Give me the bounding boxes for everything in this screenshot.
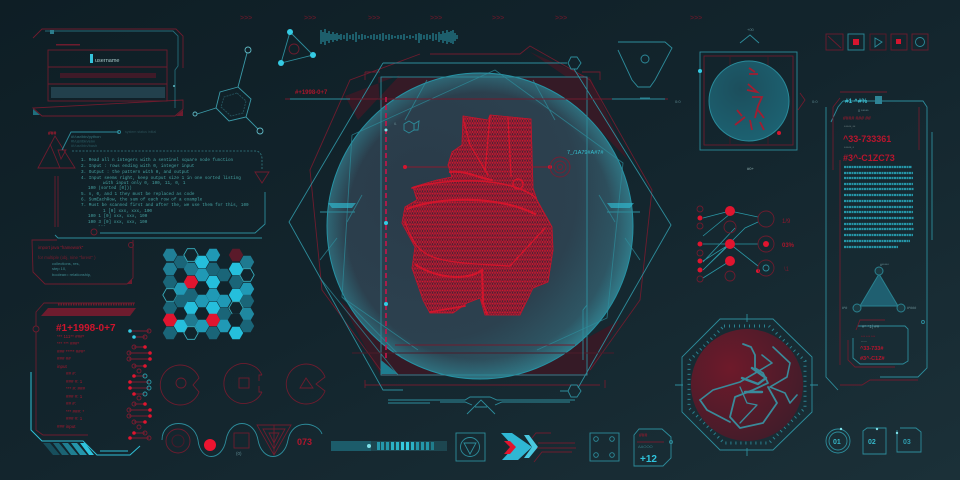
panel: code listing: 1. Read all n integers with a sentinel square node function	[81, 158, 234, 163]
panel: code listing: 4. Input seems right, keep output size 1 in one sorted listing	[81, 176, 241, 181]
sphere labels: 0:0	[675, 99, 681, 104]
panel: code listing: 100 (sorted [0]))	[88, 186, 132, 191]
warning triangle	[38, 131, 75, 168]
target crosshair	[405, 166, 550, 168]
top arrow glyphs: >>>	[492, 15, 504, 22]
panel: login form	[33, 29, 183, 116]
central scanner frame	[285, 46, 671, 414]
hex node bottom	[568, 385, 581, 397]
small triangle marker	[255, 172, 269, 183]
panel: data readout: *****,**	[844, 125, 856, 129]
red specimen	[735, 68, 764, 130]
panel: data readout: #3^-C1ZC73	[843, 153, 895, 163]
top arrow glyphs: >>>	[368, 15, 380, 22]
triangle diagram: #*#	[842, 306, 847, 310]
dark red backing	[340, 52, 628, 376]
panel: code listing: 6. SumEachRow, the sum of each row of a example	[81, 198, 203, 202]
triangle diagram: #*###	[907, 306, 916, 310]
data list text: ### #: 1	[66, 379, 83, 384]
panel: data readout: *****,*	[844, 146, 854, 150]
notched circle icons	[160, 363, 325, 405]
panel: code listing: #!/usr/bin/bash	[71, 143, 97, 148]
faint molecule	[404, 121, 419, 133]
panel: code listing	[38, 130, 269, 238]
data list text	[56, 323, 116, 429]
label 073: 073	[297, 437, 312, 447]
readout header: #1 ^#%	[845, 97, 867, 105]
readout stripes	[844, 167, 914, 247]
data list text: *** #: ###	[66, 386, 86, 391]
hatched header bar	[41, 308, 136, 316]
panel: code listing: system status initial	[125, 130, 156, 134]
network graph	[697, 206, 795, 282]
data list text: *** *** ###*	[57, 341, 80, 346]
panel: code listing: #!/usr/bin/env	[71, 138, 95, 144]
icon: molecule	[193, 47, 263, 134]
octagon specimen dial	[675, 314, 818, 456]
panel: data readout	[826, 92, 932, 390]
panel: code listing: 3. Output : the pattern with 0, and output	[81, 170, 190, 175]
data list text: ### ##	[57, 356, 71, 361]
panel: red data list	[31, 303, 140, 455]
numbered badges: 02	[868, 439, 876, 446]
nested mini panel: #3^-C1Z#	[860, 356, 885, 362]
panel: data readout: #### ### ##	[843, 116, 871, 122]
hexagon heat grid	[163, 249, 254, 339]
progress bar	[331, 441, 447, 451]
nested mini panel: ^33-733#	[860, 346, 883, 352]
icon: rounded triangle frame	[618, 42, 672, 98]
panel: small code block: for multiple (obj, nine "forest" )	[38, 255, 96, 260]
warning triangle: ###	[48, 131, 57, 137]
data list text: #1+1998-0+7	[56, 323, 116, 334]
numbered badges: 03	[903, 439, 911, 446]
top arrow glyphs: >>>	[240, 15, 252, 22]
triangle diagram	[842, 263, 916, 312]
panel: code listing: 2. Input : rows ending with 0, integer input	[81, 164, 195, 169]
panel: data readout: 0 *****	[858, 109, 869, 113]
top arrow glyphs: >>>	[304, 15, 316, 22]
wave with icons: (0)	[236, 451, 242, 456]
data list text: ### ***** ###*	[57, 349, 85, 354]
username cursor	[90, 54, 93, 63]
hatch left	[328, 203, 356, 208]
triangle diagram: #*****	[880, 263, 889, 267]
network graph: \1	[784, 267, 790, 273]
top arrow glyphs	[240, 15, 702, 22]
scan label: 7_/1A79#A#7#	[567, 150, 604, 156]
top arrow glyphs: >>>	[690, 15, 702, 22]
panel: small code block: step 10,	[52, 266, 66, 271]
panel: code listing: #!/usr/bin/python	[71, 134, 101, 139]
nested mini panel: #* *1| ##	[862, 324, 880, 329]
panel: code listing: with input only 0, 100, 11, 0, 1	[103, 181, 186, 186]
icon: node triangle	[278, 29, 316, 66]
top arrow glyphs: >>>	[555, 15, 567, 22]
inner teal frame	[381, 77, 587, 375]
panel: small code block: boolean= relationship,	[52, 272, 91, 277]
numbered badges: 01	[833, 439, 841, 446]
data list text: ### input	[57, 424, 76, 429]
panel: scanned sphere: 0:0	[812, 99, 818, 104]
nested mini panel: *****	[861, 340, 868, 344]
panel: code listing: 7. Must be scanned first and after the, we use them for this, 100	[81, 203, 249, 208]
panel: code listing: 100 3 [0] xxx, xxx, 100	[88, 220, 148, 225]
red dashed ruler	[385, 97, 387, 358]
nested mini panel: *** *** ***	[861, 335, 876, 339]
panel: scanned sphere	[675, 27, 818, 171]
panel: code listing: ***	[98, 225, 106, 230]
glass sphere	[327, 73, 633, 379]
icon: four-dot square	[590, 433, 619, 461]
panel: numeric tag: AAOOO	[638, 444, 653, 449]
username field text: username	[95, 58, 119, 64]
panel: numeric tag: ###	[639, 433, 648, 439]
hex node top	[568, 57, 581, 69]
panel: numeric tag: +12	[640, 454, 657, 465]
panel: small code block: import java "framework"	[38, 245, 84, 250]
login button	[51, 87, 165, 98]
sphere rim glow	[327, 73, 633, 379]
panel: scanned sphere: #0+	[747, 166, 754, 171]
data list text: ## #:	[66, 401, 76, 406]
panel: numeric tag	[634, 429, 672, 466]
organism strands	[700, 344, 797, 428]
panel: scanned sphere: +00	[747, 27, 755, 32]
triangle emblem	[257, 425, 291, 455]
icon: chevrons	[501, 433, 576, 462]
hatch right	[607, 203, 634, 208]
bottom circuit	[388, 397, 575, 414]
icon row: media controls	[826, 34, 928, 50]
data list text: *** 111** ###*	[57, 334, 85, 339]
header label: #+1998-0+7	[295, 90, 328, 96]
panel: code listing: 100 1 [0] xxx, xxx, 100	[88, 214, 148, 219]
numbered badges	[826, 428, 921, 454]
network labels: 1/9	[782, 219, 791, 225]
panel: small code block: collections, res,	[52, 261, 80, 266]
stripe accent	[43, 443, 94, 455]
icon: triangle in square	[456, 433, 485, 461]
audio waveform	[321, 29, 457, 45]
wave with icons	[162, 424, 322, 456]
helix nodes	[127, 329, 152, 440]
network graph: 03%	[782, 243, 795, 249]
panel: small code block	[32, 240, 134, 284]
data list text: input	[57, 364, 68, 369]
central scanner frame: 6.	[394, 121, 397, 126]
data list text: *** ###: *	[66, 409, 85, 414]
top arrow glyphs: >>>	[430, 15, 442, 22]
heart wireframe	[402, 115, 553, 315]
red indicator	[204, 439, 216, 451]
scan axis lines	[285, 98, 668, 100]
nested mini panel	[848, 320, 908, 367]
data list text: ## #:	[66, 371, 76, 376]
panel: code listing: 1 [0] xxx, xxx, 100	[103, 209, 152, 214]
data list text: ### #: 1	[66, 416, 83, 421]
panel: code listing: 5. n, 0, and 1 they must be replaced as code	[81, 192, 195, 197]
panel: data readout: ^33-733361	[843, 134, 891, 144]
data list text: ### #: 1	[66, 394, 83, 399]
